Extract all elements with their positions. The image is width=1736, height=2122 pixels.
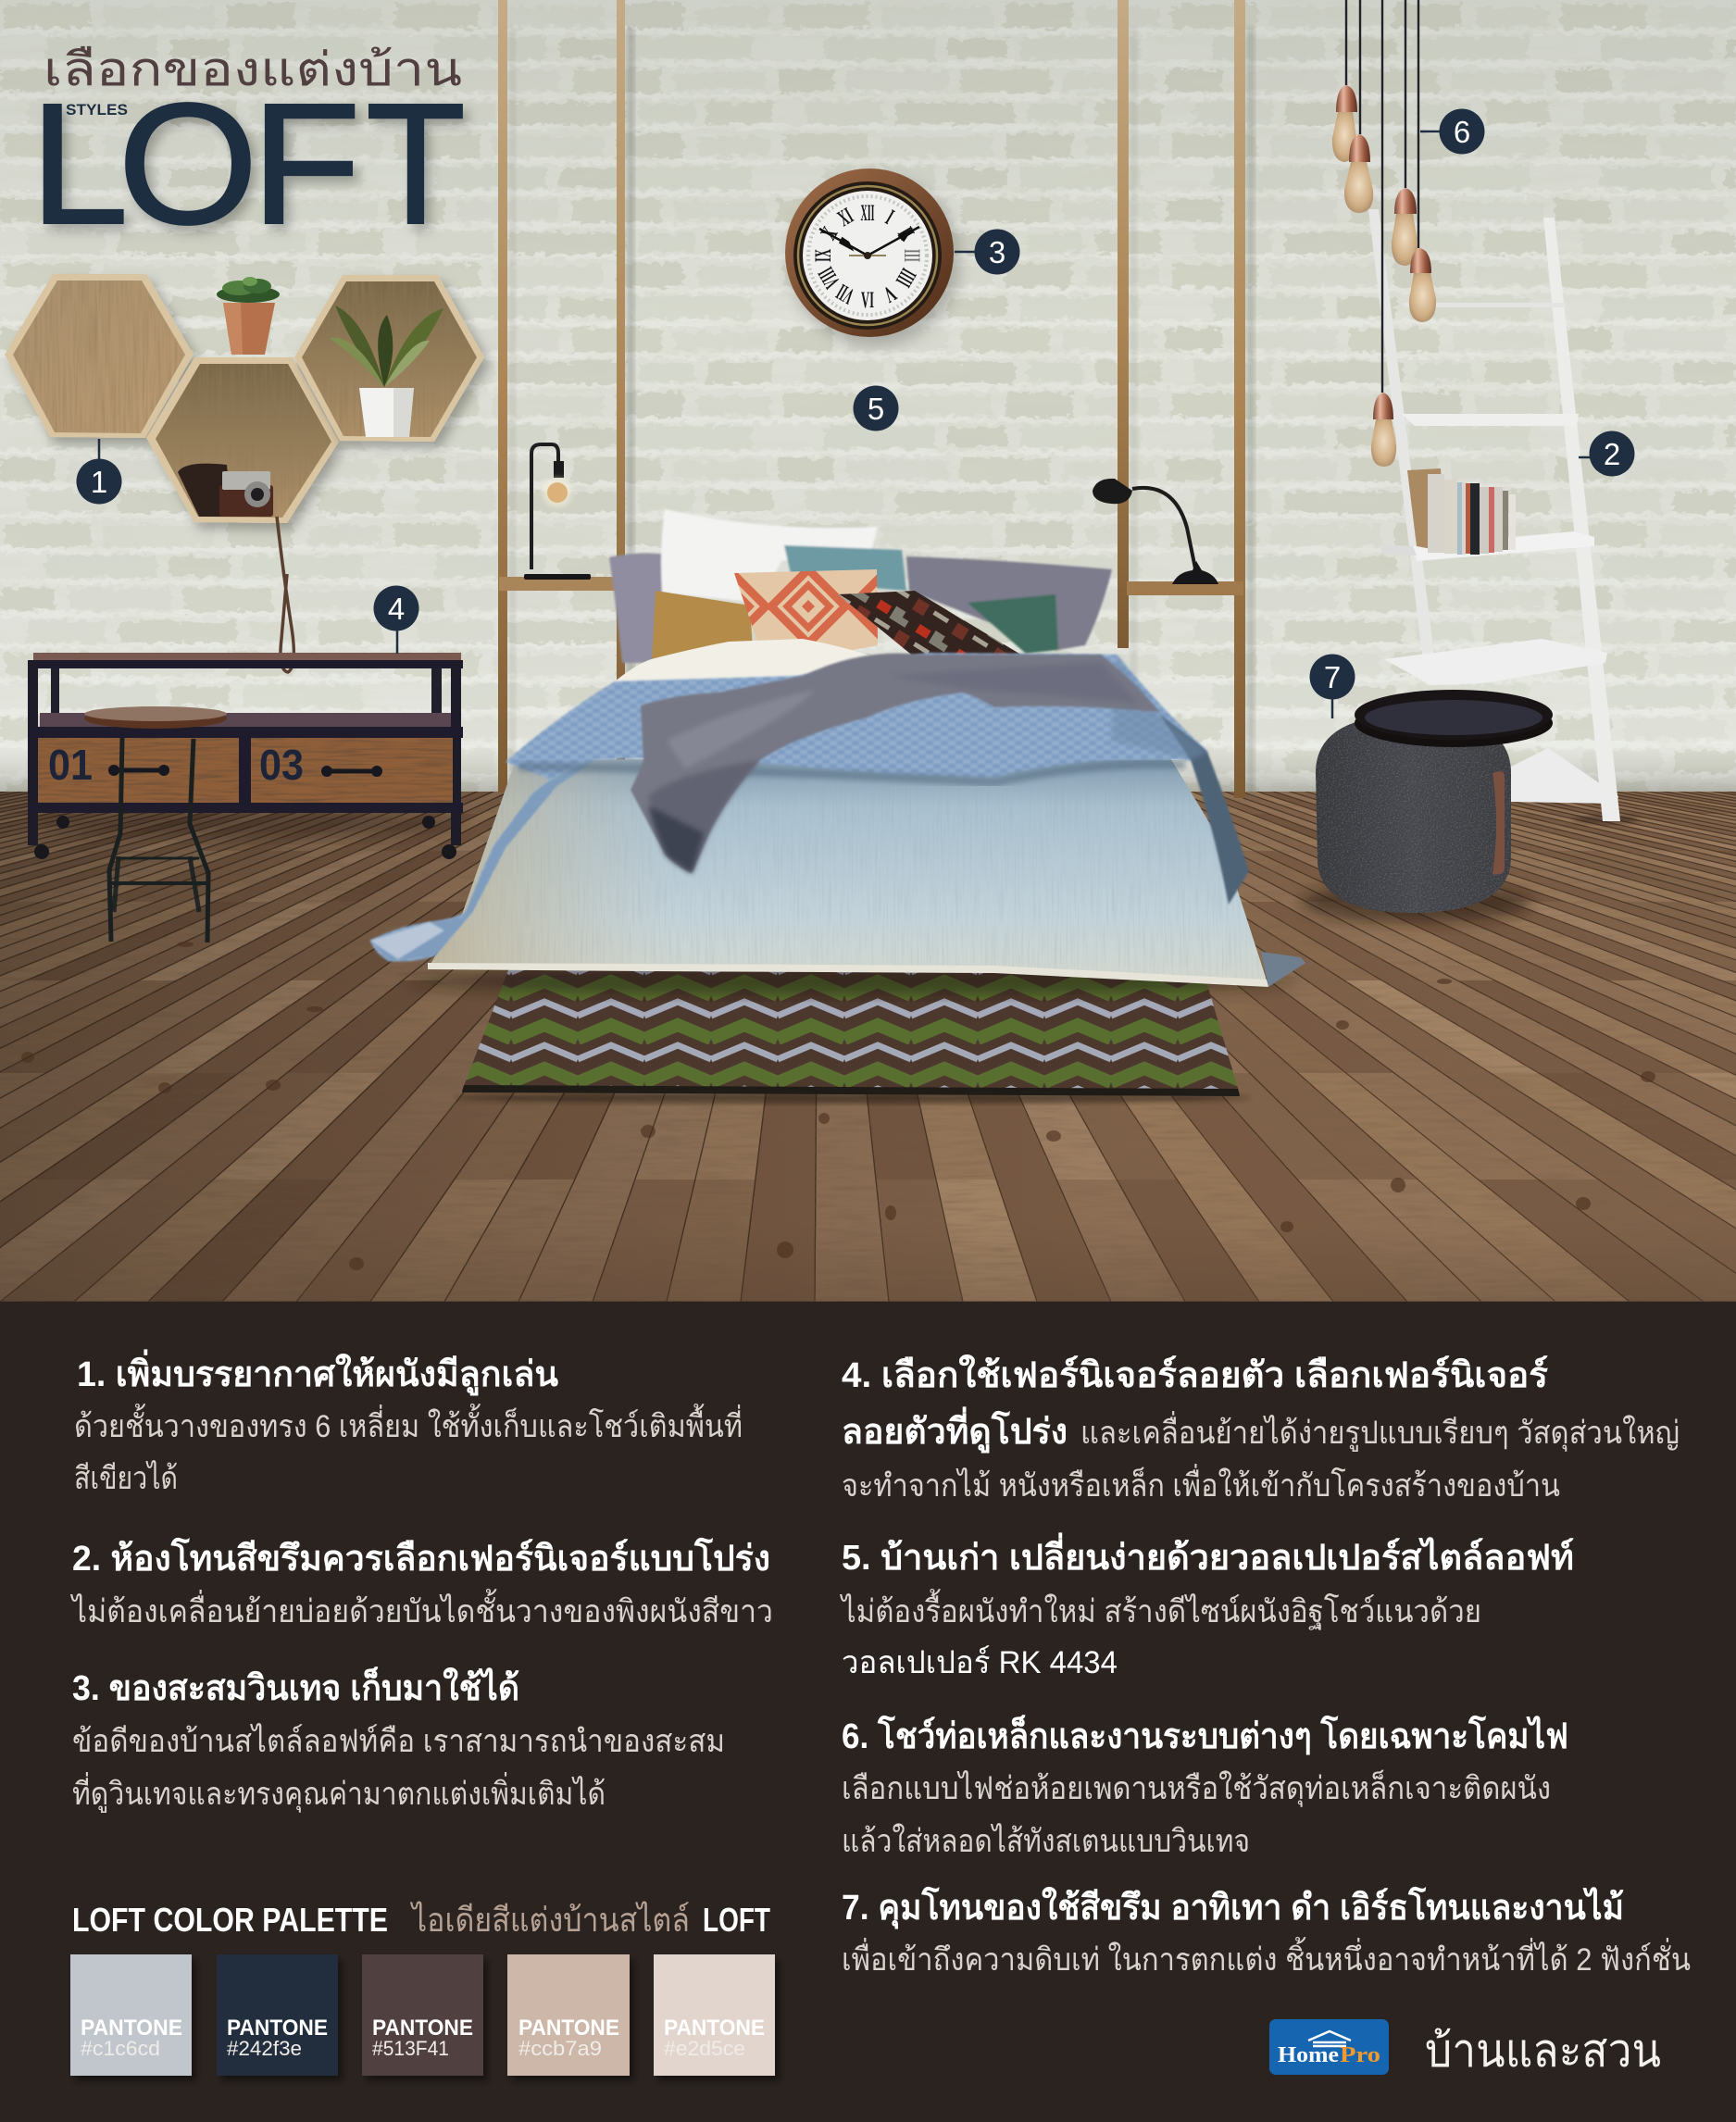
orange patterned cushion — [734, 569, 878, 657]
title: LOFT wordmark: L — [30, 69, 129, 260]
pendant cords — [1346, 0, 1418, 393]
swatch ccb7a9: PANTONE — [518, 2016, 619, 2041]
title: STYLES: STYLES — [66, 101, 128, 119]
swatch 242f3e: PANTONE — [227, 2016, 328, 2041]
colour palette heading: LOFT — [703, 1901, 770, 1939]
bed skirt — [428, 756, 1268, 987]
wall: white brick wallpaper — [0, 0, 1736, 794]
mustard cushion — [652, 591, 753, 663]
ladder bookshelf — [1368, 209, 1639, 824]
back pillows — [609, 509, 1112, 663]
desk lamp right — [1093, 479, 1218, 584]
clock numerals — [811, 201, 924, 313]
callout 7 — [1309, 654, 1355, 718]
title — [30, 44, 466, 260]
tip 6: 6. โชว์ท่อเหล็กและงานระบบต่างๆ โดยเฉพาะโคมไฟ — [842, 1715, 1568, 1756]
callout 1 — [76, 439, 122, 504]
tip 6 — [842, 1715, 1568, 1859]
hexagon wall shelves — [5, 274, 484, 523]
callout 4 — [374, 585, 418, 654]
wood plank floor — [0, 792, 1736, 1302]
clock numerals: VIII — [814, 263, 845, 293]
white potted plant — [329, 306, 443, 437]
tip 5: วอลเปเปอร์ RK 4434 — [842, 1645, 1118, 1680]
shelf right — [294, 275, 484, 442]
callout 3: 3 — [989, 235, 1005, 269]
tip 1: 1. เพิ่มบรรยากาศให้ผนังมีลูกเล่น — [77, 1349, 558, 1396]
shelf centre — [146, 357, 339, 523]
blue quilt — [370, 653, 1305, 987]
drawer 03 — [251, 738, 453, 803]
pendant 3 — [1371, 393, 1396, 467]
callout 6: 6 — [1454, 115, 1470, 149]
kilim cushion — [838, 591, 1024, 662]
swatch 242f3e: #242f3e — [227, 2037, 302, 2060]
pendant 4 — [1392, 188, 1418, 266]
swatch 513F41: #513F41 — [372, 2037, 449, 2060]
clock numerals: IIII — [891, 264, 920, 291]
tip 1 — [74, 1349, 743, 1496]
clock numerals: III — [899, 249, 924, 262]
tip 3 — [72, 1666, 725, 1813]
colour palette heading: LOFT COLOR PALETTE — [72, 1901, 388, 1939]
clock numerals: IX — [811, 249, 836, 262]
tip 5: ไม่ต้องรื้อผนังทำใหม่ สร้างดีไซน์ผนังอิฐโชว์แนวด้วย — [839, 1589, 1481, 1630]
rug — [454, 963, 1250, 1104]
terracotta potted plant — [217, 277, 280, 355]
swatch ccb7a9 — [507, 1954, 630, 2076]
tip 4: 4. เลือกใช้เฟอร์นิเจอร์ลอยตัว เลือกเฟอร์นิเจอร์ — [842, 1354, 1549, 1395]
title: LOFT wordmark — [30, 69, 466, 260]
clock numerals: II — [893, 223, 918, 243]
clock numerals: X — [816, 223, 843, 244]
swatch 513F41: PANTONE — [372, 2016, 473, 2041]
tip 4: ลอยตัวที่ดูโปร่ง — [842, 1406, 1068, 1454]
books — [1407, 468, 1516, 555]
tip 1: ด้วยชั้นวางของทรง 6 เหลี่ยม ใช้ทั้งเก็บและโชว์เติมพื้นที่ — [74, 1404, 743, 1444]
callout 5 — [854, 385, 898, 431]
clock numerals: XII — [861, 201, 874, 226]
callout 6 — [1420, 109, 1485, 154]
tip 7 — [842, 1886, 1691, 1978]
callout 7: 7 — [1324, 660, 1341, 694]
tip 3: ข้อดีของบ้านสไตล์ลอฟท์คือ เราสามารถนำของสะสม — [72, 1723, 725, 1759]
title: LOFT wordmark: T — [366, 69, 466, 260]
frame posts on the wall — [498, 0, 1255, 798]
HomePro logo — [1269, 2019, 1389, 2075]
swatch c1c6cd — [70, 1954, 192, 2076]
panel background — [0, 1302, 1736, 2122]
pendant lamps — [1332, 0, 1436, 467]
metal stool — [84, 706, 227, 942]
camera on shelf with strap — [178, 464, 293, 672]
HomePro logo: Pro — [1340, 2043, 1380, 2067]
baan lae suan brand: บ้านและสวน — [1425, 2025, 1661, 2077]
swatch 513F41 — [362, 1954, 483, 2076]
tip 3: 3. ของสะสมวินเทจ เก็บมาใช้ได้ — [72, 1666, 519, 1708]
console wheels — [34, 816, 456, 859]
clock numerals: VI — [861, 288, 874, 313]
tip 2: 2. ห้องโทนสีขรึมควรเลือกเฟอร์นิเจอร์แบบโปร่ง — [72, 1537, 770, 1579]
callout 2: 2 — [1604, 437, 1620, 471]
swatch c1c6cd: #c1c6cd — [81, 2037, 160, 2060]
colour palette heading: ไอเดียสีแต่งบ้านสไตล์ — [409, 1901, 690, 1939]
clock numerals: XI — [833, 204, 857, 231]
tip 3: ที่ดูวินเทจและทรงคุณค่ามาตกแต่งเพิ่มเติมได้ — [72, 1772, 606, 1813]
pendant 5 — [1409, 248, 1436, 322]
title: LOFT wordmark: O — [118, 69, 258, 260]
bed — [370, 509, 1305, 994]
clock numerals: VII — [832, 279, 858, 308]
clock numerals: I — [881, 206, 898, 230]
tip 2: ไม่ต้องเคลื่อนย้ายบ่อยด้วยบันไดชั้นวางของพิงผนังสีขาว — [69, 1589, 773, 1629]
tip 4: จะทำจากไม้ หนังหรือเหล็ก เพื่อให้เข้ากับโครงสร้างของบ้าน — [842, 1464, 1560, 1504]
title: LOFT wordmark: F — [251, 69, 361, 260]
tip 7: 7. คุมโทนของใช้สีขรึม อาทิเทา ดำ เอิร์ธโทนและงานไม้ — [842, 1886, 1624, 1929]
HomePro logo: Home — [1278, 2043, 1339, 2067]
swatch e2d5ce: #e2d5ce — [664, 2037, 745, 2060]
tip 4 — [842, 1354, 1680, 1504]
clock — [785, 169, 960, 346]
callout 3 — [955, 230, 1020, 274]
title: Thai heading: เลือกของแต่งบ้าน — [44, 44, 462, 95]
drawer 01: 01 — [48, 741, 93, 789]
swatch e2d5ce — [654, 1954, 775, 2076]
callout 1: 1 — [91, 465, 107, 499]
drawer 01 — [38, 738, 239, 803]
tip 5 — [839, 1532, 1574, 1680]
tip 5: 5. บ้านเก่า เปลี่ยนง่ายด้วยวอลเปเปอร์สไตล์ลอฟท์ — [842, 1532, 1574, 1578]
colour palette heading — [72, 1901, 770, 1939]
colour swatches — [70, 1954, 775, 2076]
ottoman with tray — [1301, 690, 1553, 923]
pendant 1 — [1332, 85, 1357, 162]
tip 6: แล้วใส่หลอดไส้ทังสเตนแบบวินเทจ — [842, 1823, 1250, 1859]
white sheet — [612, 639, 880, 688]
clock hands — [819, 227, 919, 259]
tip 1: สีเขียวได้ — [74, 1460, 178, 1496]
tip 2 — [69, 1537, 773, 1629]
swatch ccb7a9: #ccb7a9 — [518, 2037, 602, 2060]
callout 5: 5 — [868, 392, 884, 426]
swatch c1c6cd: PANTONE — [81, 2016, 182, 2041]
shelf left — [5, 274, 194, 438]
tray — [1355, 690, 1553, 747]
desk lamp left — [524, 444, 591, 580]
drawer 03: 03 — [259, 741, 304, 789]
console with drawers — [28, 653, 463, 859]
tip 6: เลือกแบบไฟช่อห้อยเพดานหรือใช้วัสดุท่อเหล็กเจาะติดผนัง — [842, 1769, 1551, 1807]
tip 4: และเคลื่อนย้ายได้ง่ายรูปแบบเรียบๆ วัสดุส่วนใหญ่ — [1080, 1411, 1680, 1452]
callout 4: 4 — [388, 592, 405, 626]
swatch e2d5ce: PANTONE — [664, 2016, 765, 2041]
swatch 242f3e — [217, 1954, 338, 2076]
pendant 2 — [1344, 134, 1373, 213]
grey throw — [631, 654, 1159, 873]
callout 2 — [1579, 431, 1635, 476]
clock numerals: V — [879, 281, 900, 307]
